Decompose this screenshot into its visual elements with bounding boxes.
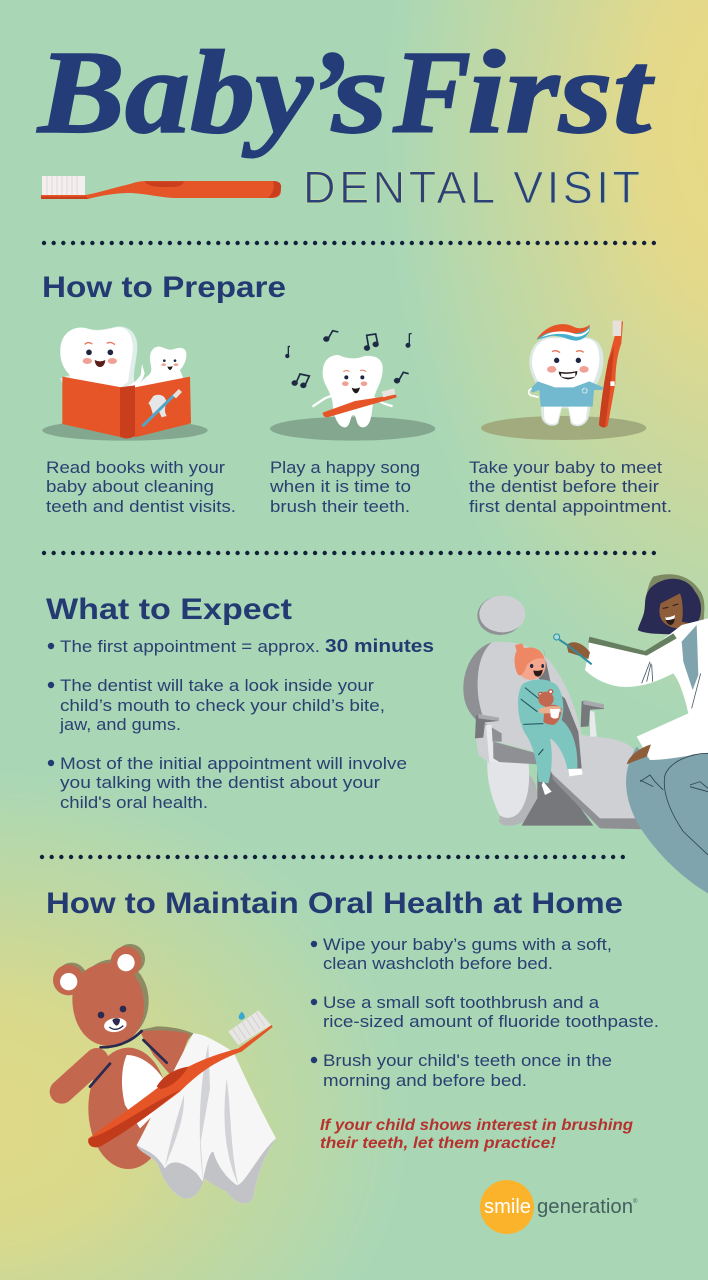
heading: what to expect: What to Expect: [46, 593, 292, 626]
text: home care list: Wipe your baby’s gums with a soft,: [323, 935, 612, 954]
washcloth: [137, 1033, 276, 1203]
text: read books: Read books with your: [46, 458, 225, 477]
text: what to expect list: The first appointment = approx.: [60, 637, 320, 656]
logo: smile generation: smile: [484, 1196, 531, 1218]
text: meet the dentist: Take your baby to meet: [469, 458, 662, 477]
icon: music notes: [285, 331, 412, 388]
text: read books: baby about cleaning: [46, 477, 214, 496]
book left cover: [62, 377, 122, 437]
text: what to expect list: jaw, and gums.: [59, 715, 181, 734]
text: play a song: Play a happy song: [270, 458, 420, 477]
heading: how to prepare: How to Prepare: [42, 271, 286, 304]
text: what to expect list: 30 minutes: [325, 636, 434, 656]
illustration: tooth dentist with toothbrush: [481, 321, 646, 440]
logo: smile generation: generation: [537, 1196, 633, 1218]
book right cover: [135, 377, 191, 437]
illustration: teddy bear with toothbrush and washcloth: [53, 944, 276, 1203]
illustration: teeth reading a book: [42, 326, 208, 441]
heading: maintain oral health: How to Maintain Oral Health at Home: [46, 887, 623, 920]
text: home care list: clean washcloth before bed.: [323, 954, 553, 973]
icon: toothbrush: [41, 176, 281, 199]
title: Baby: [36, 26, 314, 158]
bear shadow: [57, 944, 193, 1043]
text: meet the dentist: first dental appointment.: [469, 497, 672, 516]
text: meet the dentist: the dentist before their: [469, 477, 659, 496]
callout: let them practice: [320, 1117, 633, 1152]
text: what to expect list: The dentist will take a look inside your: [60, 676, 374, 695]
bear: [53, 946, 190, 1169]
logo: smile generation: ®: [633, 1198, 638, 1205]
logo: smile generation: [480, 1180, 638, 1234]
text: what to expect list: Most of the initial appointment will involve: [60, 754, 407, 773]
title: s: [331, 26, 388, 158]
text: home care list: [311, 935, 659, 1090]
text: play a song: brush their teeth.: [270, 497, 410, 516]
title: irst: [467, 26, 656, 158]
dentist: [554, 574, 708, 893]
text: meet the dentist: [469, 458, 672, 516]
callout: let them practice: If your child shows interest in brushing: [320, 1117, 633, 1134]
title: [36, 26, 656, 158]
text: home care list: morning and before bed.: [323, 1071, 527, 1090]
dental chair: [463, 596, 647, 829]
text: play a song: when it is time to: [269, 477, 411, 496]
callout: let them practice: their teeth, let them practice!: [320, 1135, 557, 1152]
text: play a song: [269, 458, 420, 516]
text: what to expect list: child's oral health.: [60, 793, 208, 812]
big tooth face: [86, 349, 92, 355]
text: home care list: rice-sized amount of fluoride toothpaste.: [323, 1012, 659, 1031]
title: F: [392, 26, 471, 158]
text: what to expect list: you talking with the dentist about your: [60, 773, 380, 792]
small teddy: [538, 689, 562, 725]
title: ’: [308, 26, 348, 158]
text: read books: teeth and dentist visits.: [46, 497, 236, 516]
subtitle: DENTAL VISIT: [303, 162, 640, 213]
small tooth face: [163, 359, 166, 362]
text: home care list: Brush your child's teeth once in the: [323, 1051, 612, 1070]
text: what to expect list: child’s mouth to check your child’s bite,: [60, 696, 385, 715]
text: what to expect list: [48, 636, 434, 812]
child: [515, 642, 583, 795]
text: read books: [46, 458, 236, 516]
illustration: dental chair with child and dentist: [463, 574, 708, 893]
illustration: tooth singing and brushing: [270, 331, 435, 441]
text: home care list: Use a small soft toothbrush and a: [323, 993, 600, 1012]
toothbrush: [88, 1010, 273, 1147]
